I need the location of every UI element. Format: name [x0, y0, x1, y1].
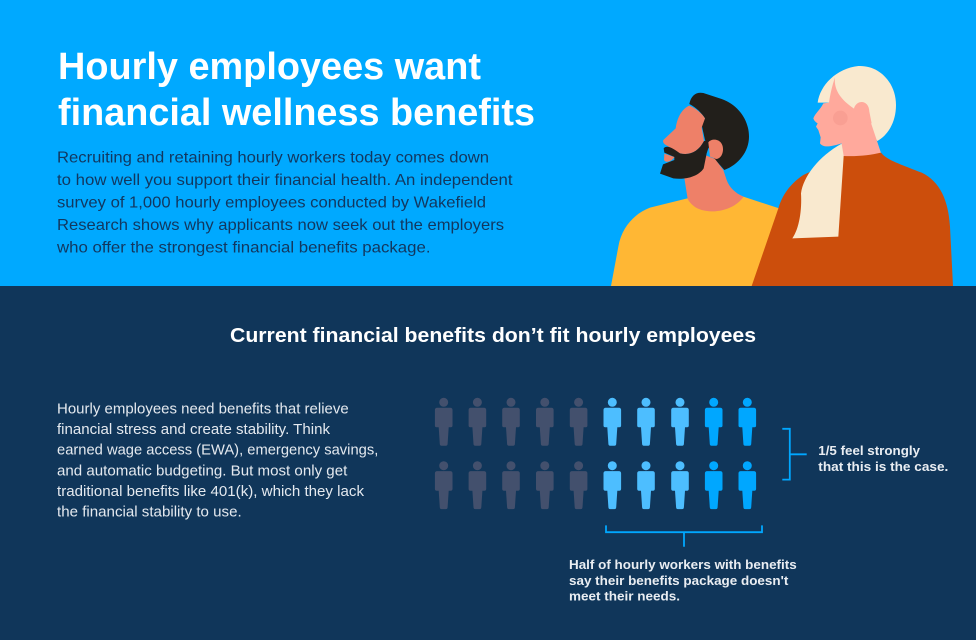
man: shirt — [611, 197, 780, 286]
woman: body — [752, 144, 953, 286]
pictogram row 1 — [435, 398, 756, 446]
woman: face and neck — [813, 77, 883, 160]
panel: navy lower background — [0, 286, 976, 640]
intro text block: Research shows why applicants now seek out the employers — [57, 217, 504, 234]
man: head and neck — [660, 93, 749, 211]
right bracket — [782, 429, 807, 480]
callout: one fifth — [818, 443, 948, 474]
pictogram: 20 people — [435, 398, 756, 509]
woman: head — [813, 66, 896, 160]
callout: half of workers: meet their needs. — [569, 588, 680, 604]
body paragraph: and automatic budgeting. But most only get — [57, 463, 347, 479]
callout: half of workers: Half of hourly workers with benefits — [569, 557, 797, 572]
man figure — [611, 93, 780, 286]
intro text block: who offer the strongest financial benefits package. — [56, 239, 431, 256]
callout: half of workers — [569, 557, 797, 604]
woman figure — [752, 66, 953, 286]
callout: one fifth: that this is the case. — [818, 459, 948, 474]
man: neck — [683, 155, 744, 211]
woman: ponytail — [792, 144, 844, 238]
title — [58, 46, 535, 134]
callout: one fifth: 1/5 feel strongly — [818, 443, 921, 458]
section heading: Current financial benefits don’t fit hourly employees — [230, 324, 756, 347]
body paragraph: earned wage access (EWA), emergency savings, — [57, 443, 378, 459]
woman: sweater — [752, 153, 953, 286]
callout: half of workers: say their benefits package doesn't — [569, 573, 789, 588]
body paragraph — [57, 401, 378, 521]
body paragraph: financial stress and create stability. Think — [57, 422, 331, 438]
man: ear — [708, 140, 723, 159]
intro text block: to how well you support their financial health. An independent — [57, 172, 513, 189]
man: hair — [689, 93, 749, 170]
man: lip — [664, 154, 674, 162]
intro text block — [56, 150, 513, 256]
woman: hair back — [818, 66, 896, 141]
man: face — [663, 106, 705, 154]
illustration: man and woman in profile — [611, 66, 953, 286]
woman: cheek — [833, 111, 848, 125]
intro text block: survey of 1,000 hourly employees conducted by Wakefield — [57, 194, 486, 211]
title: Hourly employees want — [58, 46, 481, 88]
body paragraph: the financial stability to use. — [57, 505, 242, 521]
man: beard — [660, 140, 711, 179]
intro text block: Recruiting and retaining hourly workers today comes down — [57, 150, 489, 167]
pictogram row 2 — [435, 461, 756, 509]
body paragraph: traditional benefits like 401(k), which they lack — [57, 484, 365, 500]
title: financial wellness benefits — [58, 92, 535, 134]
body paragraph: Hourly employees need benefits that relieve — [57, 401, 349, 417]
bottom bracket — [606, 525, 762, 547]
woman: ear — [854, 102, 872, 123]
panel: blue header background — [0, 0, 976, 286]
